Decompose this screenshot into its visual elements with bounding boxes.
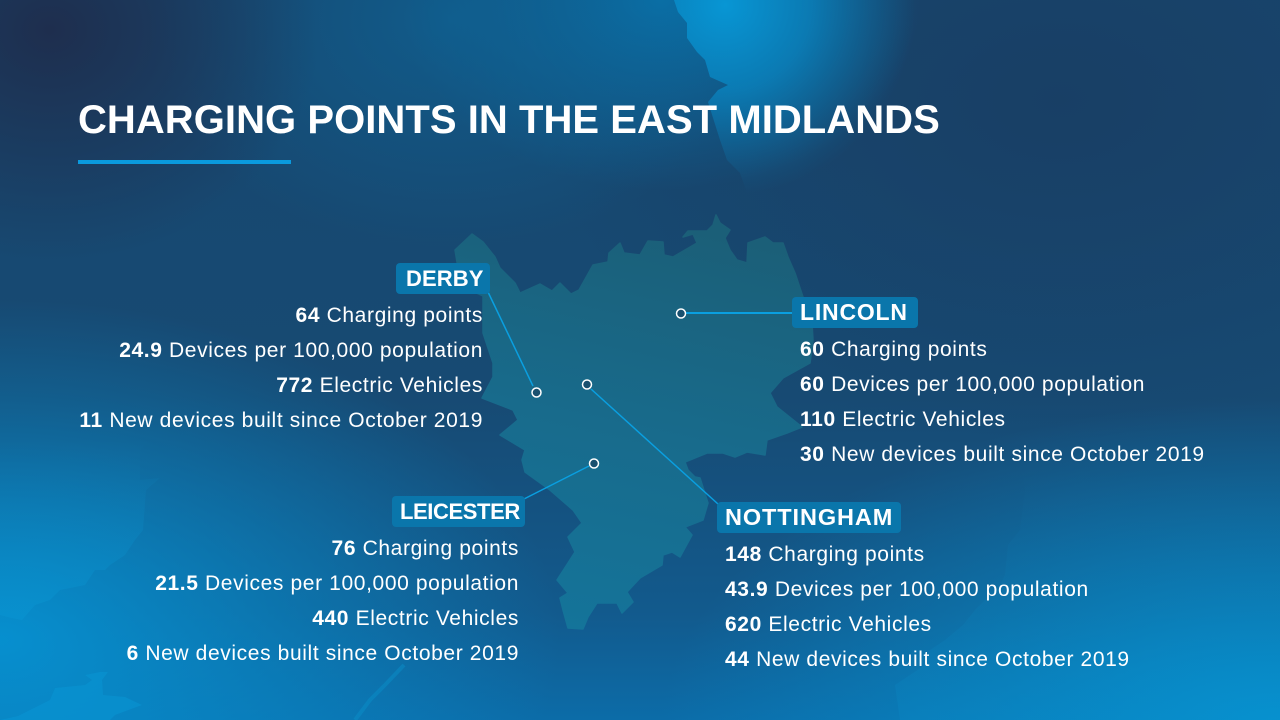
stat: Derby devices: 24.9 Devices per 100,000 population [119,339,483,362]
map: East Midlands region [455,215,813,629]
panel: Lincoln [792,297,1205,466]
connector: Derby [488,292,533,386]
stat: Lincoln vehicles: 110 Electric Vehicles [800,408,1006,431]
background: estuary [355,665,404,720]
label: Nottingham: NOTTINGHAM [725,504,893,530]
marker: Leicester [590,459,598,468]
background: northern sea glow [674,0,1000,230]
panel: Derby [79,263,490,432]
panel: Leicester [127,496,525,665]
stat: Nottingham new devices: 44 New devices built since October 2019 [725,648,1130,671]
background: western sea [0,440,160,620]
connector: Leicester [524,466,589,499]
stat: Leicester charging points: 76 Charging points [332,537,519,560]
stat: Leicester devices: 21.5 Devices per 100,000 population [155,572,519,595]
stat: Derby charging points: 64 Charging points [296,304,483,327]
label: Derby [396,263,490,294]
background: eastern sea [895,470,1280,720]
label: Leicester: LEICESTER [400,499,520,524]
panel: Nottingham [717,502,1130,671]
stat: Lincoln new devices: 30 New devices built since October 2019 [800,443,1205,466]
label: Derby: DERBY [406,266,484,291]
connector: Lincoln [686,312,793,314]
marker: Nottingham [582,380,592,389]
stat: Derby vehicles: 772 Electric Vehicles [276,374,483,397]
stat: Leicester vehicles: 440 Electric Vehicles [312,607,519,630]
marker: Lincoln [676,309,686,318]
stat: Lincoln charging points: 60 Charging points [800,338,987,361]
background: southern sea inlet [0,672,142,720]
stat: Lincoln devices: 60 Devices per 100,000 population [800,373,1145,396]
connector: Nottingham [591,389,718,504]
stat: Derby new devices: 11 New devices built since October 2019 [79,409,483,432]
stat: Nottingham devices: 43.9 Devices per 100,000 population [725,578,1089,601]
label: Lincoln: LINCOLN [800,299,908,325]
title underline [78,160,291,164]
stat: Leicester new devices: 6 New devices built since October 2019 [127,642,519,665]
marker: Derby [532,388,541,397]
connector lines and location markers [488,292,793,504]
stat: Nottingham vehicles: 620 Electric Vehicles [725,613,932,636]
title: CHARGING POINTS IN THE EAST MIDLANDS [78,98,940,142]
stat: Nottingham charging points: 148 Charging points [725,543,925,566]
